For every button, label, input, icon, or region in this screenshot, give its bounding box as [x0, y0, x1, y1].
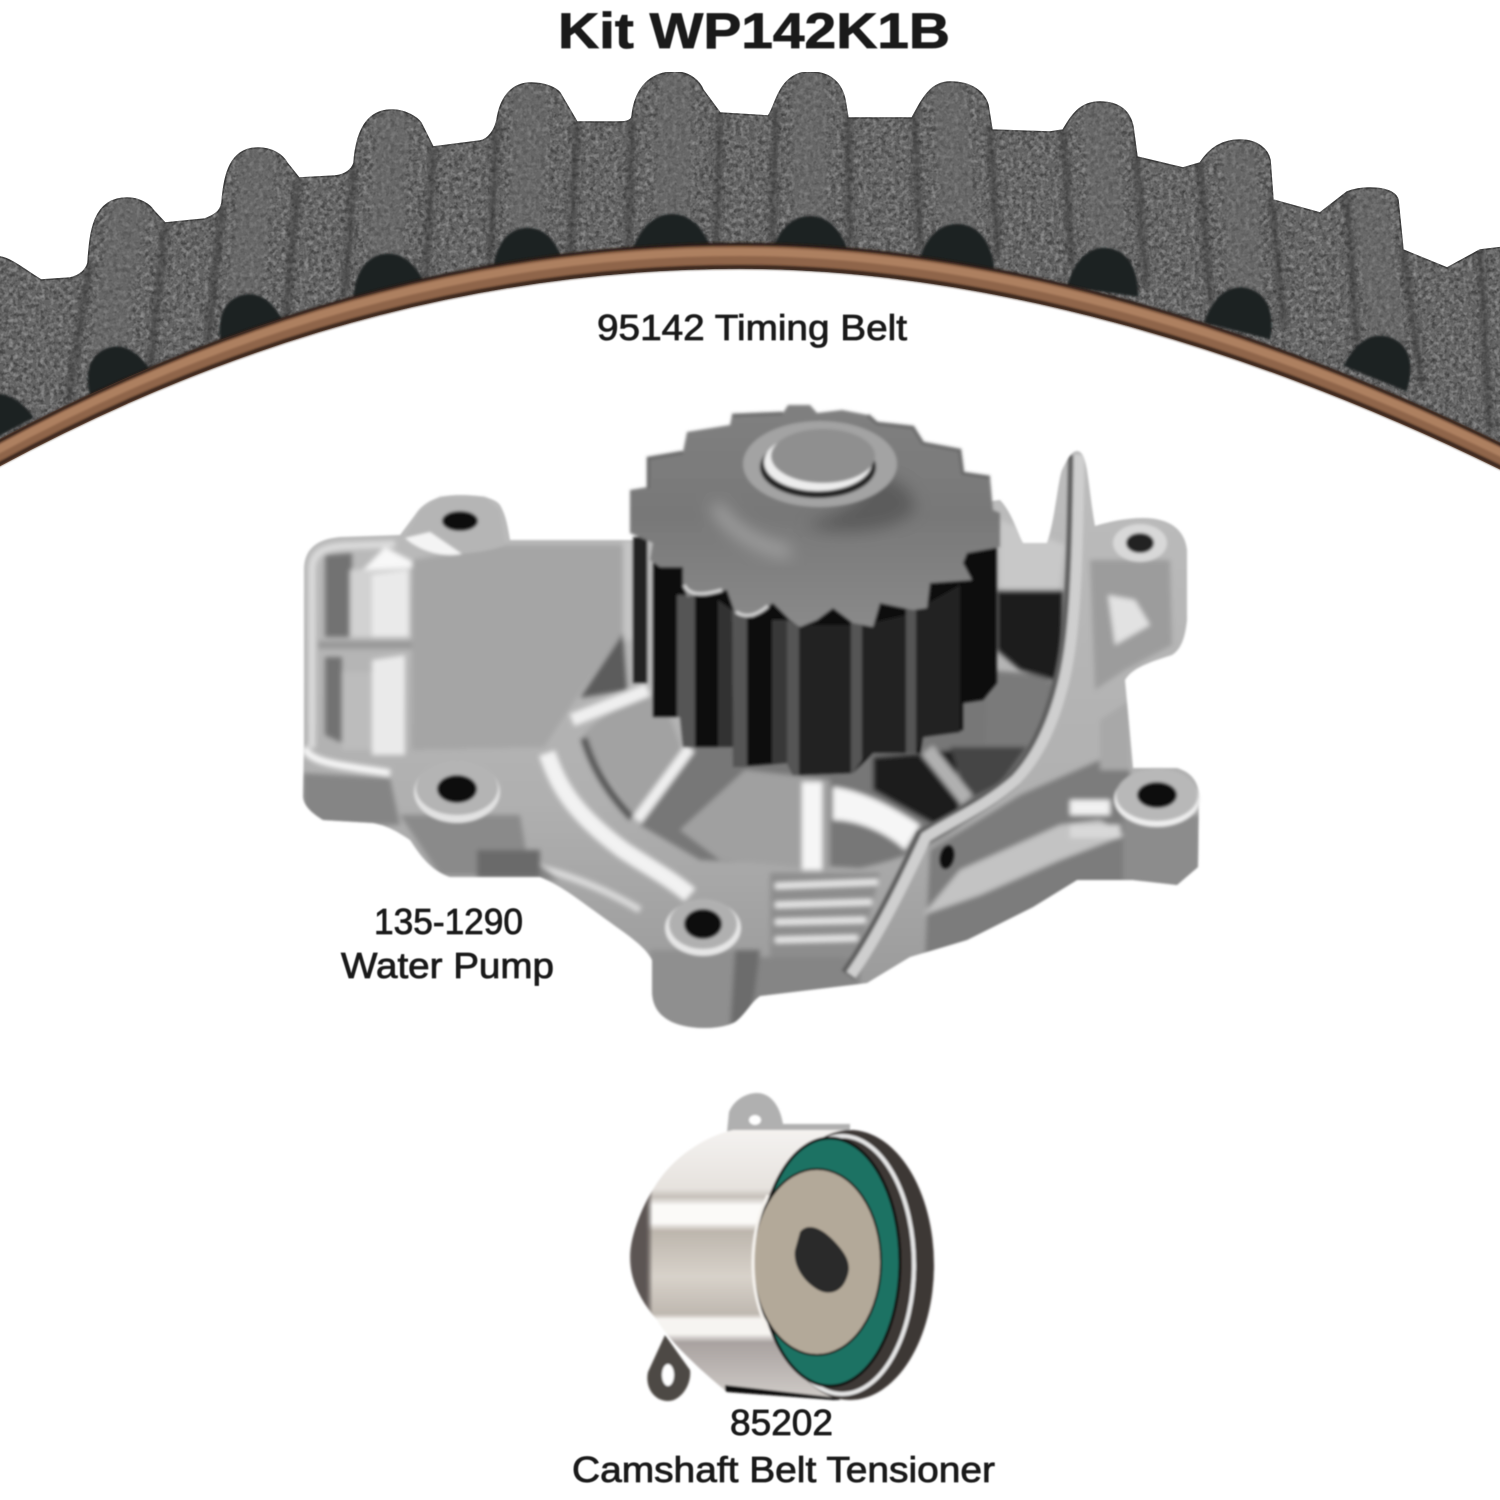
light spokes: [572, 690, 648, 720]
mounting bosses and bolt holes: [405, 497, 1200, 956]
pump housing: [290, 440, 1220, 1040]
under-gear cavity: [585, 696, 680, 810]
roller body: [620, 1120, 850, 1405]
plate strip beside gear: [623, 540, 634, 640]
right upper flange: [1090, 560, 1172, 690]
belt tooth shading: [0, 90, 1490, 451]
top mounting lug: [727, 1093, 850, 1132]
bottom mounting lug: [647, 1335, 690, 1401]
right boss cylinder: [1123, 815, 1200, 890]
part number: 135-1290: [374, 901, 523, 942]
belt dark tooth recesses: [0, 214, 1423, 451]
left frame recess: [325, 553, 352, 743]
bearing face highlight: [753, 1195, 768, 1330]
housing curved rib: [848, 455, 1079, 975]
outer dark rim: [766, 1130, 934, 1400]
bottom lug shadow: [650, 950, 734, 1028]
belt toothed body: [0, 72, 1500, 470]
part: water pump: [290, 405, 1220, 1040]
part: camshaft belt tensioner: [620, 1093, 934, 1405]
gear sprocket: [630, 405, 1000, 775]
part number: 85202: [730, 1402, 833, 1443]
lower right web: [925, 760, 1130, 960]
keyed centre bore: [795, 1227, 849, 1293]
gear hub: [743, 421, 897, 507]
label: water pump: [341, 901, 554, 986]
gear top face with teeth: [630, 405, 1000, 627]
title: Kit WP142K1B: [558, 3, 950, 59]
white rim highlight: [770, 1136, 914, 1394]
left boss shadow: [400, 815, 530, 875]
cover plate: [412, 545, 640, 750]
label: tensioner: [572, 1402, 995, 1490]
part: timing belt: [0, 72, 1500, 472]
label: timing belt: 95142 Timing Belt: [597, 307, 907, 348]
belt brown backing strip: [0, 244, 1500, 472]
green seal ring: [760, 1138, 900, 1386]
part name: Water Pump: [341, 945, 554, 986]
beige bearing face: [753, 1169, 881, 1355]
gear dark tooth columns: [633, 530, 997, 775]
part name: Camshaft Belt Tensioner: [572, 1449, 995, 1490]
lower fins: [770, 873, 880, 965]
